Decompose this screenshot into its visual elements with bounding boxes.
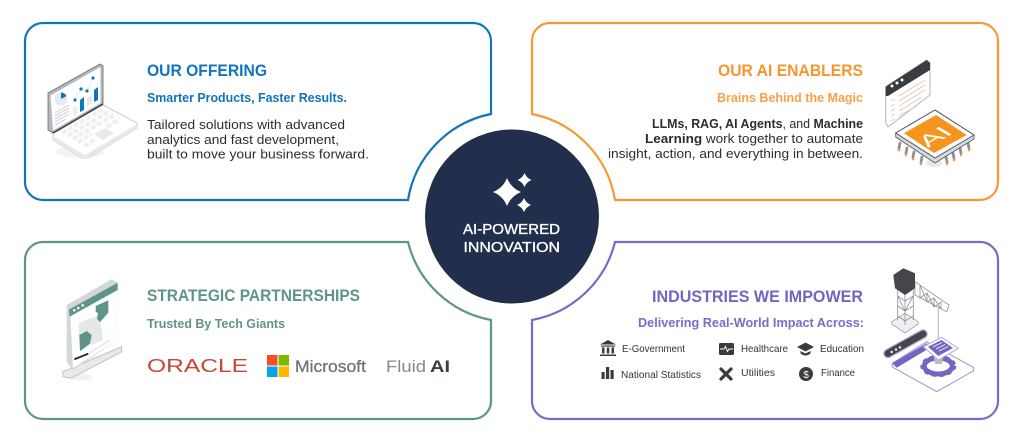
body text xyxy=(147,117,369,162)
panel: strategic partnerships xyxy=(25,242,491,419)
center title: INNOVATION xyxy=(464,239,560,256)
icon: puzzle window xyxy=(63,279,122,380)
body text: LLMs, RAG, AI Agents, and Machine xyxy=(652,116,863,131)
subheading: Trusted By Tech Giants xyxy=(147,317,285,331)
label: Finance: Finance xyxy=(821,367,855,379)
label: Healthcare: Healthcare xyxy=(741,343,788,355)
body text: Learning work together to automate xyxy=(645,131,863,146)
panel: our AI enablers xyxy=(532,23,998,200)
subheading: Delivering Real-World Impact Across: xyxy=(638,315,864,330)
center badge xyxy=(425,130,599,304)
icon: utilities xyxy=(721,369,731,379)
heading: our AI enablers: OUR AI ENABLERS xyxy=(718,62,863,80)
logo: Oracle: ORACLE xyxy=(147,356,248,376)
body text: Tailored solutions with advanced xyxy=(147,117,345,132)
icon: government xyxy=(600,340,616,356)
icon: sparkles xyxy=(493,173,532,212)
panel outline: purple xyxy=(532,242,998,419)
icon: laptop xyxy=(48,64,137,158)
icon: crane and gear platform xyxy=(888,268,973,392)
icon: AI chip with code window: AI xyxy=(911,123,958,151)
center title xyxy=(463,221,560,256)
icon: AI chip with code window xyxy=(886,60,974,167)
icon: education xyxy=(797,342,814,356)
logo: Microsoft: Microsoft xyxy=(295,358,366,376)
logo: Fluid AI: AI xyxy=(430,358,450,376)
subheading: Smarter Products, Faster Results. xyxy=(147,90,347,105)
panel outline: teal xyxy=(25,242,491,419)
label: E-Government: E-Government xyxy=(622,343,685,355)
body text xyxy=(608,116,863,161)
body text: built to move your business forward. xyxy=(147,146,369,162)
label: Utilities: Utilities xyxy=(741,367,775,379)
heading: industries we impower: INDUSTRIES WE IMPOWER xyxy=(652,288,863,306)
logo: Microsoft xyxy=(267,355,366,377)
heading: strategic partnerships: STRATEGIC PARTNERSHIPS xyxy=(147,287,360,305)
logo: Fluid AI xyxy=(386,358,450,376)
panel outline: blue xyxy=(25,23,491,200)
body text: analytics and fast development, xyxy=(147,132,339,147)
heading: our offering: OUR OFFERING xyxy=(147,62,267,80)
logo: Fluid AI: Fluid xyxy=(386,358,426,376)
panel: industries we impower xyxy=(532,242,998,419)
label: National Statistics: National Statistics xyxy=(621,369,701,381)
label: Education: Education xyxy=(820,343,864,355)
panel outline: orange xyxy=(532,23,998,200)
center title: AI-POWERED xyxy=(463,221,560,238)
icon: finance xyxy=(799,367,813,381)
icon: national statistics xyxy=(602,367,614,379)
icon: finance: $ xyxy=(803,370,809,381)
panel: our offering xyxy=(25,23,491,200)
subheading: Brains Behind the Magic xyxy=(717,90,863,105)
icon: healthcare xyxy=(719,343,734,355)
body text: insight, action, and everything in between. xyxy=(608,146,863,161)
